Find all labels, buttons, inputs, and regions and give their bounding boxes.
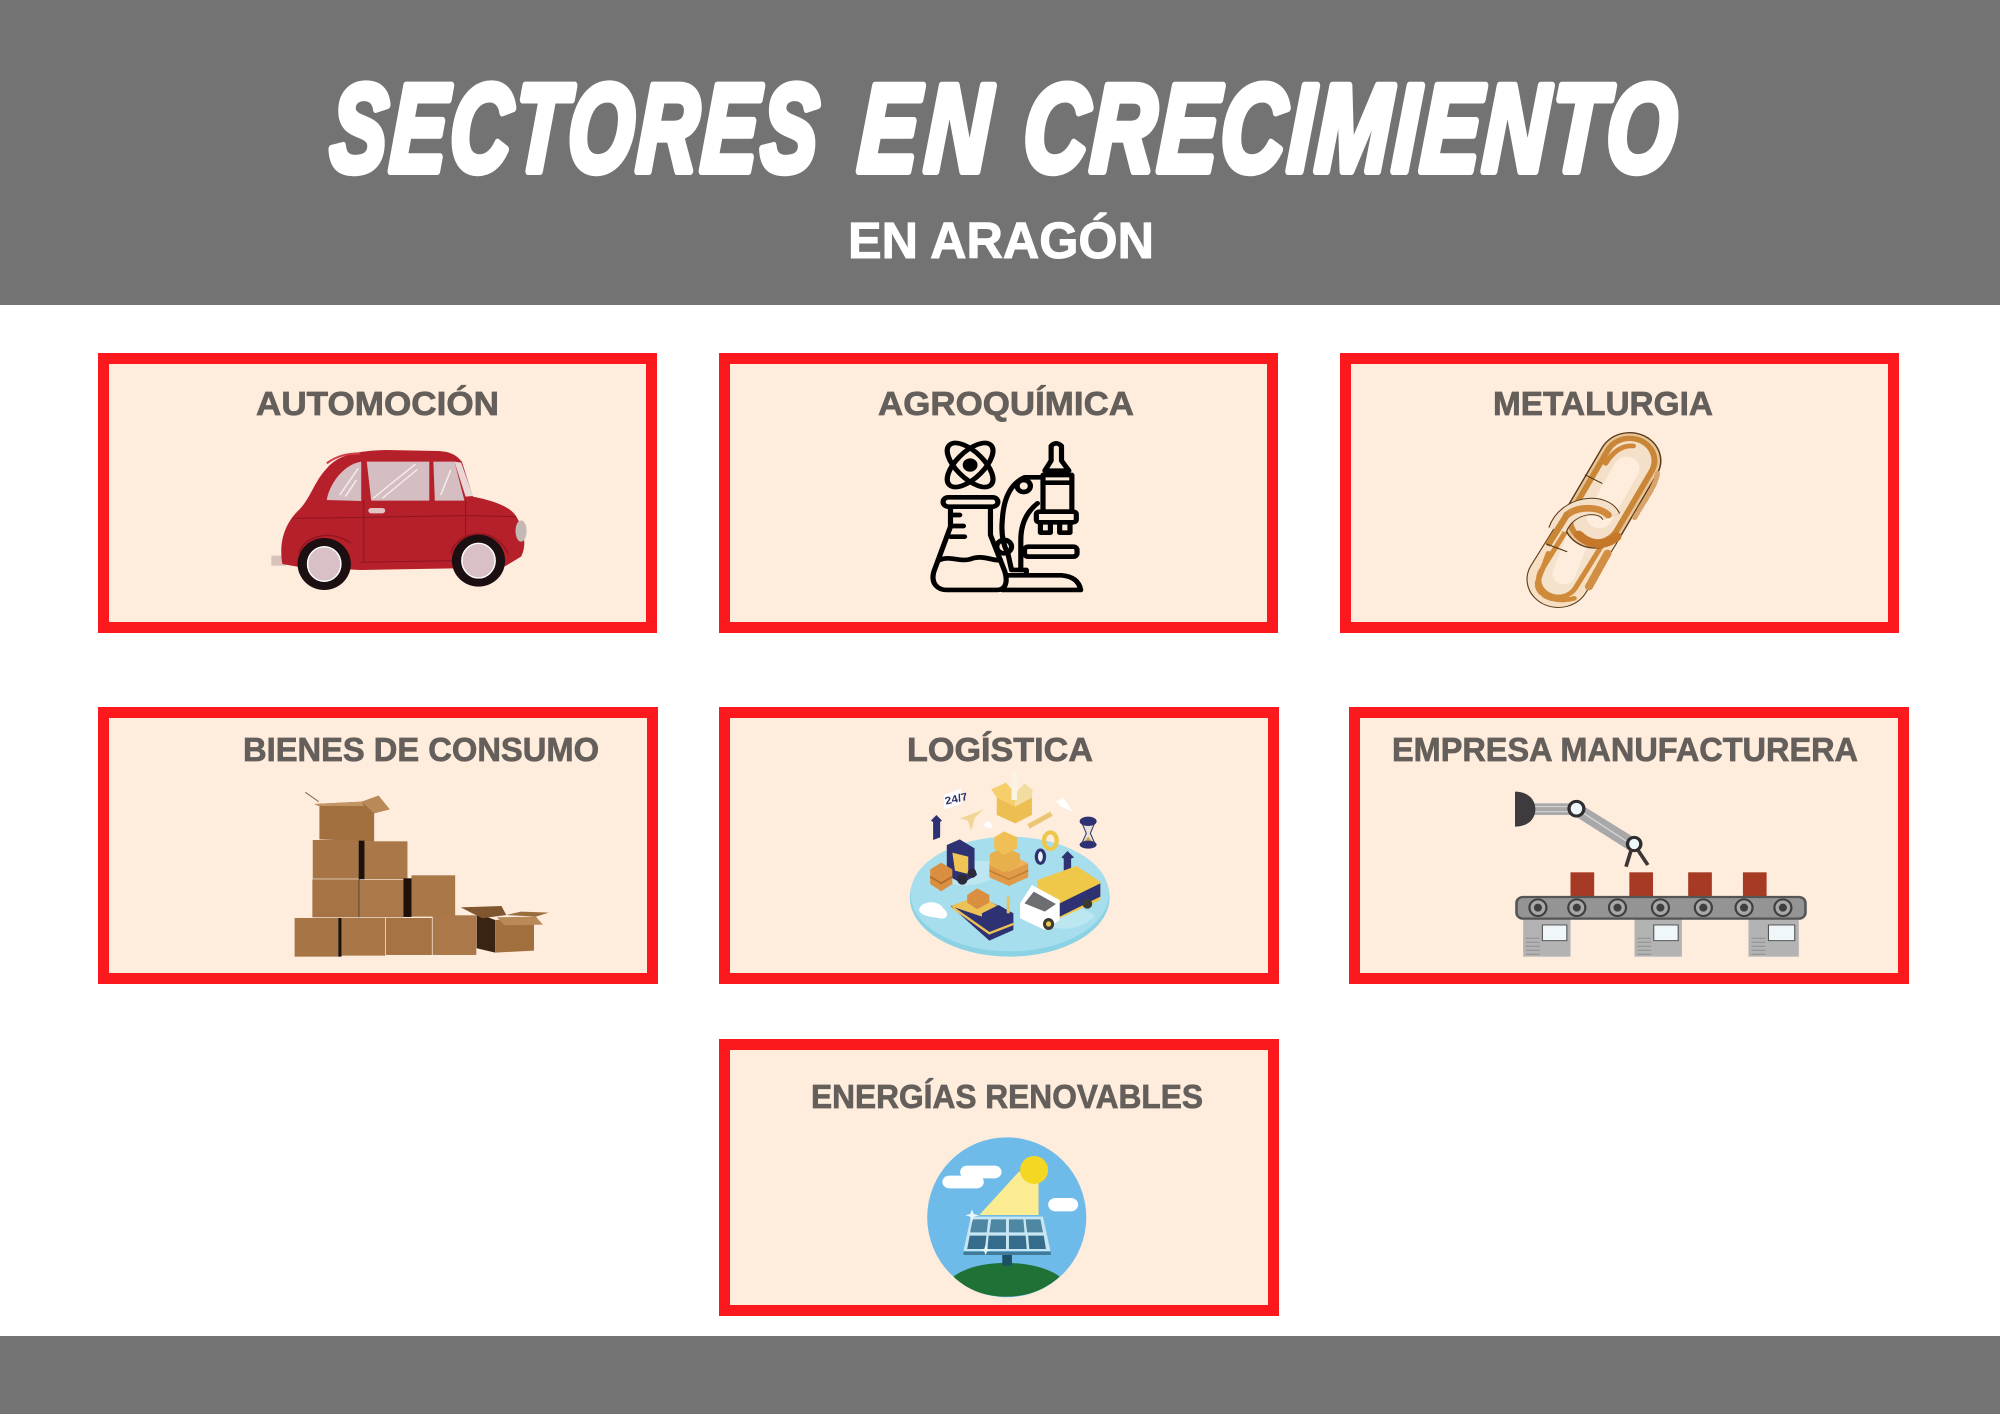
panel frame: [724, 712, 1274, 978]
hourglass: [1080, 817, 1097, 849]
map pin and ring: [1036, 832, 1057, 863]
sun: [1020, 1156, 1048, 1184]
panel frame: [1354, 712, 1904, 978]
icon: robot arm and conveyor: [1515, 792, 1805, 957]
panel frame: [104, 712, 652, 978]
panel frame: [724, 358, 1272, 628]
icon: cardboard boxes: [295, 792, 549, 957]
heading: METALURGIA: [1493, 385, 1713, 422]
panel: energías renovables: [724, 1044, 1274, 1310]
heading: AGROQUÍMICA: [878, 385, 1134, 422]
clouds: [942, 1166, 1078, 1211]
panel frame: [724, 1044, 1274, 1310]
panel frame: [104, 358, 652, 628]
central stack of boxes: [989, 831, 1028, 886]
footer band: [0, 1336, 2000, 1414]
heading: ENERGÍAS RENOVABLES: [811, 1078, 1203, 1115]
panel: logística: [724, 712, 1274, 978]
title: SECTORES: [328, 60, 822, 198]
icon: red car: [271, 450, 527, 590]
heading: LOGÍSTICA: [907, 731, 1093, 768]
sun beam: [979, 1172, 1039, 1215]
icon: isometric logistics scene: [910, 772, 1110, 957]
heading: BIENES DE CONSUMO: [243, 731, 599, 768]
panel: metalurgia: [1346, 358, 1894, 628]
conveyor legs: [1523, 919, 1799, 957]
icon: flask, atom and microscope: [933, 436, 1081, 590]
panel: empresa manufacturera: [1354, 712, 1904, 978]
ship: [950, 888, 1013, 941]
title: EN: [856, 59, 996, 197]
solar array: [963, 1209, 1051, 1266]
link overlap: [1546, 506, 1611, 552]
panel: bienes de consumo: [104, 712, 652, 978]
24/7 sign: 24/7: [944, 791, 969, 807]
open box: [991, 772, 1033, 823]
truck: [1020, 866, 1100, 930]
icon: chain links: [1537, 446, 1657, 600]
title: CRECIMIENTO: [1021, 59, 1680, 197]
red products: [1571, 872, 1767, 897]
heading: AUTOMOCIÓN: [256, 385, 499, 422]
title: [328, 59, 1680, 198]
lower link: [1537, 530, 1608, 600]
navy arrows: [931, 815, 1074, 875]
icon: solar panel badge: [927, 1137, 1086, 1297]
subtitle: EN ARAGÓN: [848, 212, 1154, 269]
panel: automoción: [104, 358, 652, 628]
upper link: [1579, 446, 1657, 544]
panel frame: [1346, 358, 1894, 628]
logistics disc: [910, 837, 1110, 957]
forklift: [930, 839, 977, 891]
plane and plank: [960, 797, 1073, 831]
panel: agroquímica: [724, 358, 1272, 628]
header band: [0, 0, 2000, 305]
hill: [953, 1263, 1060, 1297]
robot arm: [1515, 792, 1648, 867]
heading: EMPRESA MANUFACTURERA: [1392, 731, 1858, 768]
conveyor belt: [1516, 897, 1805, 919]
